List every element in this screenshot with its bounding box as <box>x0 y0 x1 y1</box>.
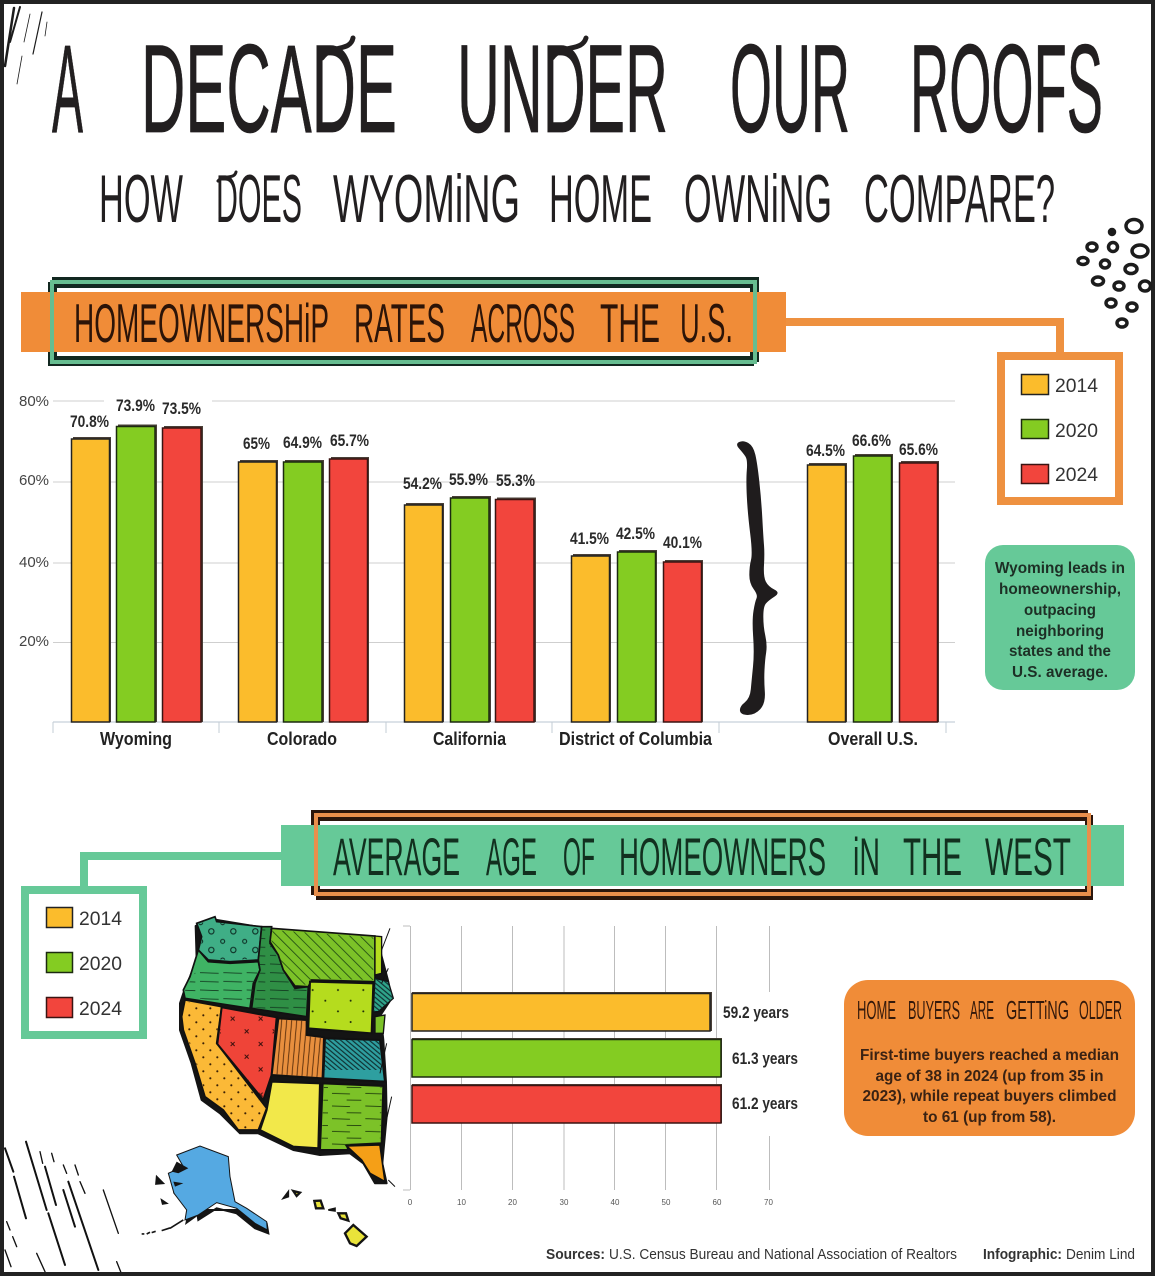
state: Idaho <box>252 927 308 1017</box>
callout: Wyoming leads: Wyoming leads in <box>995 560 1125 577</box>
map: western United States <box>142 917 395 1246</box>
state: Montana <box>270 928 375 987</box>
heading banner: homeownership rates: RATES <box>354 292 445 354</box>
decoration: scratches bottom left <box>5 1142 121 1272</box>
heading banner: average age: WEST <box>985 828 1071 887</box>
title: OUR <box>730 20 850 159</box>
state: New Mexico <box>320 1083 383 1150</box>
footer: sources and credit: U.S. Census Bureau and National Association of Realtors <box>609 1246 957 1263</box>
heading banner: homeownership rates: HOMEOWNERSHiP <box>74 292 329 354</box>
edge hatching <box>380 928 395 1187</box>
legend: age years: 2024 <box>79 999 122 1020</box>
map shadow <box>180 919 392 1183</box>
category labels: Overall U.S. <box>828 729 918 749</box>
age axis labels: 0 <box>408 1198 413 1207</box>
legend: homeownership years: 2024 <box>1055 465 1098 486</box>
bars: California: 54.2% <box>403 475 442 493</box>
bars: California <box>403 471 536 722</box>
decoration: ring dots top right <box>1078 220 1150 327</box>
callout: Wyoming leads: U.S. average. <box>1012 664 1108 681</box>
bars: California: 55.9% <box>449 471 488 489</box>
legend: age years: 2020 <box>79 954 122 975</box>
state: Utah <box>272 1018 324 1078</box>
age bar: 2020: 61.3 years <box>732 1050 798 1068</box>
callout: Wyoming leads: neighboring <box>1016 623 1104 640</box>
callout body: First-time buyers reached a median <box>860 1047 1119 1064</box>
heading banner: average age: AVERAGE <box>333 828 460 887</box>
heading banner: homeownership rates <box>21 277 786 366</box>
bar chart: average age <box>403 926 798 1207</box>
footer: sources and credit: Infographic: <box>983 1246 1062 1263</box>
age chart grid <box>403 926 770 1190</box>
bars: District of Columbia: 42.5% <box>616 525 655 543</box>
bars: Wyoming <box>70 397 203 722</box>
decoration: scratches top left <box>5 7 47 84</box>
bars: California: 55.3% <box>496 472 535 490</box>
eastern edge states <box>373 936 393 1033</box>
callout body <box>860 1047 1119 1126</box>
heading banner: average age: iN <box>853 828 880 887</box>
state: Nevada <box>217 1007 277 1100</box>
age bar: 2014: 59.2 years <box>723 1004 789 1022</box>
subtitle <box>99 161 1055 237</box>
state: Texas tip <box>347 1145 385 1182</box>
age axis labels: 30 <box>560 1198 569 1207</box>
age axis labels: 20 <box>508 1198 517 1207</box>
age axis labels: 50 <box>662 1198 671 1207</box>
legend: homeownership years: 2014 <box>1055 376 1098 397</box>
footer: sources and credit <box>546 1246 1135 1263</box>
callout heading <box>857 995 1122 1025</box>
state: Hawaii <box>283 1191 367 1246</box>
callout: Wyoming leads: homeownership, <box>999 581 1121 598</box>
state: Arizona <box>260 1082 320 1148</box>
age bar: 2024 <box>412 1084 798 1123</box>
callout: home buyers getting older <box>844 980 1135 1136</box>
callout: Wyoming leads: outpacing <box>1024 602 1096 619</box>
heading banner: homeownership rates: U.S. <box>680 292 733 354</box>
callout body: to 61 (up from 58). <box>923 1109 1056 1126</box>
bars: Overall U.S.: 66.6% <box>852 432 891 450</box>
chart gridlines and y axis <box>19 393 955 733</box>
age axis labels <box>408 1198 773 1207</box>
heading banner: average age: HOMEOWNERS <box>619 828 826 887</box>
title: A <box>52 20 83 159</box>
age axis labels: 70 <box>764 1198 773 1207</box>
callout heading: HOME <box>857 995 896 1025</box>
category labels <box>100 729 918 749</box>
state: Wyoming <box>308 982 373 1033</box>
bars: Overall U.S.: 64.5% <box>806 442 845 460</box>
callout heading: GETTiNG <box>1006 995 1069 1025</box>
age axis labels: 60 <box>713 1198 722 1207</box>
subtitle: OWNiNG <box>684 161 832 237</box>
state: Colorado <box>323 1038 385 1082</box>
callout heading: BUYERS <box>908 995 960 1025</box>
state: California <box>182 1000 267 1130</box>
age bar: 2020 <box>412 1038 798 1077</box>
bars: Colorado: 64.9% <box>283 434 322 452</box>
state: Oregon <box>183 950 260 1008</box>
category labels: Colorado <box>267 729 337 749</box>
title: UNDER <box>457 20 668 159</box>
category labels: California <box>433 729 507 749</box>
age bar: 2014 <box>412 992 789 1031</box>
bars: Wyoming: 70.8% <box>70 413 109 431</box>
heading banner: average age: AGE <box>486 828 537 887</box>
age bar: 2024: 61.2 years <box>732 1095 798 1113</box>
callout body: 2023), while repeat buyers climbed <box>862 1088 1116 1105</box>
subtitle: HOW <box>99 161 183 237</box>
subtitle: HOME <box>549 161 652 237</box>
chart gridlines and y axis: 20% <box>19 633 49 650</box>
bars: District of Columbia <box>570 525 703 722</box>
legend: homeownership years <box>1001 356 1119 501</box>
heading banner: average age <box>281 810 1124 900</box>
bars: Colorado: 65.7% <box>330 432 369 450</box>
bars: District of Columbia: 41.5% <box>570 530 609 548</box>
heading banner: homeownership rates: ACROSS <box>471 292 575 354</box>
bars: Wyoming: 73.9% <box>116 397 155 415</box>
bars: Overall U.S. <box>806 432 939 722</box>
age axis labels: 40 <box>611 1198 620 1207</box>
heading banner: homeownership rates: THE <box>600 292 660 354</box>
state: Washington <box>197 917 262 962</box>
bar chart: homeownership rates <box>19 393 955 749</box>
chart gridlines and y axis: 40% <box>19 554 49 571</box>
subtitle: WYOMiNG <box>333 161 520 237</box>
state: Alaska <box>142 1146 268 1234</box>
chart gridlines and y axis: 60% <box>19 472 49 489</box>
title: DECADE <box>141 20 397 159</box>
footer: sources and credit: Sources: <box>546 1246 605 1263</box>
callout: Wyoming leads: states and the <box>1009 643 1111 660</box>
category labels: District of Columbia <box>559 729 713 749</box>
subtitle: DOES <box>216 161 302 237</box>
title <box>52 20 1103 159</box>
bars: Colorado: 65% <box>243 435 270 453</box>
category labels: Wyoming <box>100 729 172 749</box>
bars: Colorado <box>238 432 369 722</box>
legend: age years: 2014 <box>79 909 122 930</box>
legend connector: age <box>84 856 281 888</box>
callout heading: ARE <box>970 995 994 1025</box>
icon: hand-drawn brace <box>737 441 778 715</box>
legend connector: homeownership <box>786 322 1060 354</box>
heading banner: average age: OF <box>563 828 595 887</box>
age axis labels: 10 <box>457 1198 466 1207</box>
callout: Wyoming leads <box>985 545 1135 690</box>
chart gridlines and y axis: 80% <box>19 393 49 410</box>
callout body: age of 38 in 2024 (up from 35 in <box>876 1068 1104 1085</box>
bars: Wyoming: 73.5% <box>162 400 201 418</box>
footer: sources and credit: Denim Lind <box>1066 1246 1135 1263</box>
bars: District of Columbia: 40.1% <box>663 534 702 552</box>
legend: homeownership years: 2020 <box>1055 421 1098 442</box>
bars: Overall U.S.: 65.6% <box>899 441 938 459</box>
legend: age years <box>25 890 143 1035</box>
heading banner: average age: THE <box>903 828 962 887</box>
